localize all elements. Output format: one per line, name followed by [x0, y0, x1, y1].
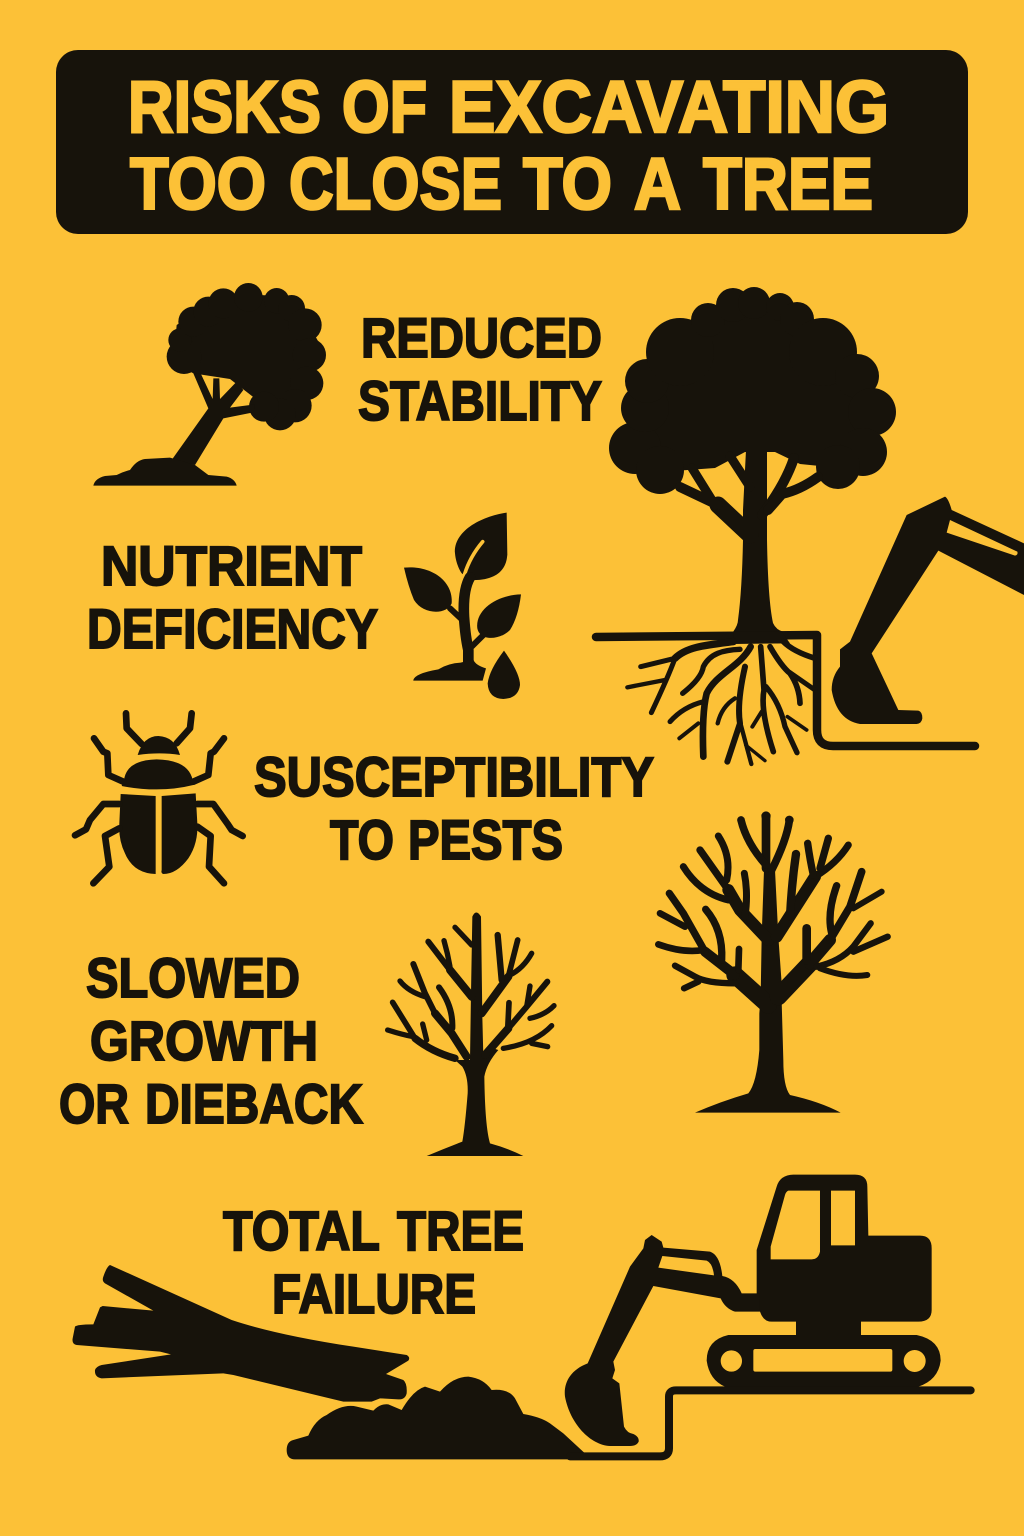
icon: large bare tree — [658, 811, 888, 1113]
title banner: OF — [342, 67, 427, 148]
tree trunk and branches — [680, 450, 818, 632]
title banner: CLOSE — [289, 144, 502, 225]
label: total tree failure: TREE — [397, 1200, 524, 1262]
trench ground line — [570, 1390, 971, 1456]
icon: fallen tree trunk — [72, 1265, 409, 1402]
title banner — [56, 50, 968, 234]
label: total tree failure: TOTAL — [223, 1200, 380, 1262]
label: susceptibility to pests: SUSCEPTIBILITY — [254, 746, 654, 808]
title banner: TOO — [130, 144, 266, 225]
label: slowed growth or dieback — [59, 947, 363, 1135]
label: reduced stability: STABILITY — [358, 370, 602, 432]
icon: small bare tree — [388, 912, 554, 1156]
excavator body and cab — [707, 1175, 941, 1387]
icon: large tree with cut roots — [596, 287, 975, 764]
title banner: A — [634, 144, 681, 225]
title banner: EXCAVATING — [449, 67, 889, 148]
tree canopy — [609, 287, 896, 494]
label: slowed growth or dieback: SLOWED — [86, 947, 300, 1009]
icon: excavator arm digging at roots — [832, 497, 1024, 724]
label: slowed growth or dieback: DIEBACK — [145, 1073, 363, 1135]
label: reduced stability: REDUCED — [361, 307, 602, 369]
label: slowed growth or dieback: GROWTH — [90, 1010, 318, 1072]
label: nutrient deficiency: DEFICIENCY — [87, 598, 378, 660]
label: total tree failure — [223, 1200, 524, 1325]
label: total tree failure: FAILURE — [272, 1263, 476, 1325]
icon: leaning tree — [93, 283, 326, 486]
title banner: RISKS — [128, 67, 321, 148]
ground line with trench — [596, 635, 975, 746]
title banner: TREE — [703, 144, 873, 225]
icon: beetle — [75, 713, 243, 883]
icon: excavator with trench line — [565, 1175, 971, 1456]
label: nutrient deficiency: NUTRIENT — [101, 535, 362, 597]
tree roots — [627, 632, 815, 764]
label: slowed growth or dieback: OR — [59, 1073, 129, 1135]
label: susceptibility to pests: PESTS — [408, 809, 563, 871]
label: nutrient deficiency — [87, 535, 378, 660]
icon: plant with water drop — [404, 513, 521, 699]
label: susceptibility to pests: TO — [330, 809, 394, 871]
icon: soil mound — [287, 1377, 585, 1459]
label: susceptibility to pests — [254, 746, 654, 871]
title banner: TO — [523, 144, 612, 225]
label: reduced stability — [358, 307, 602, 432]
excavator boom and bucket — [565, 1235, 760, 1446]
